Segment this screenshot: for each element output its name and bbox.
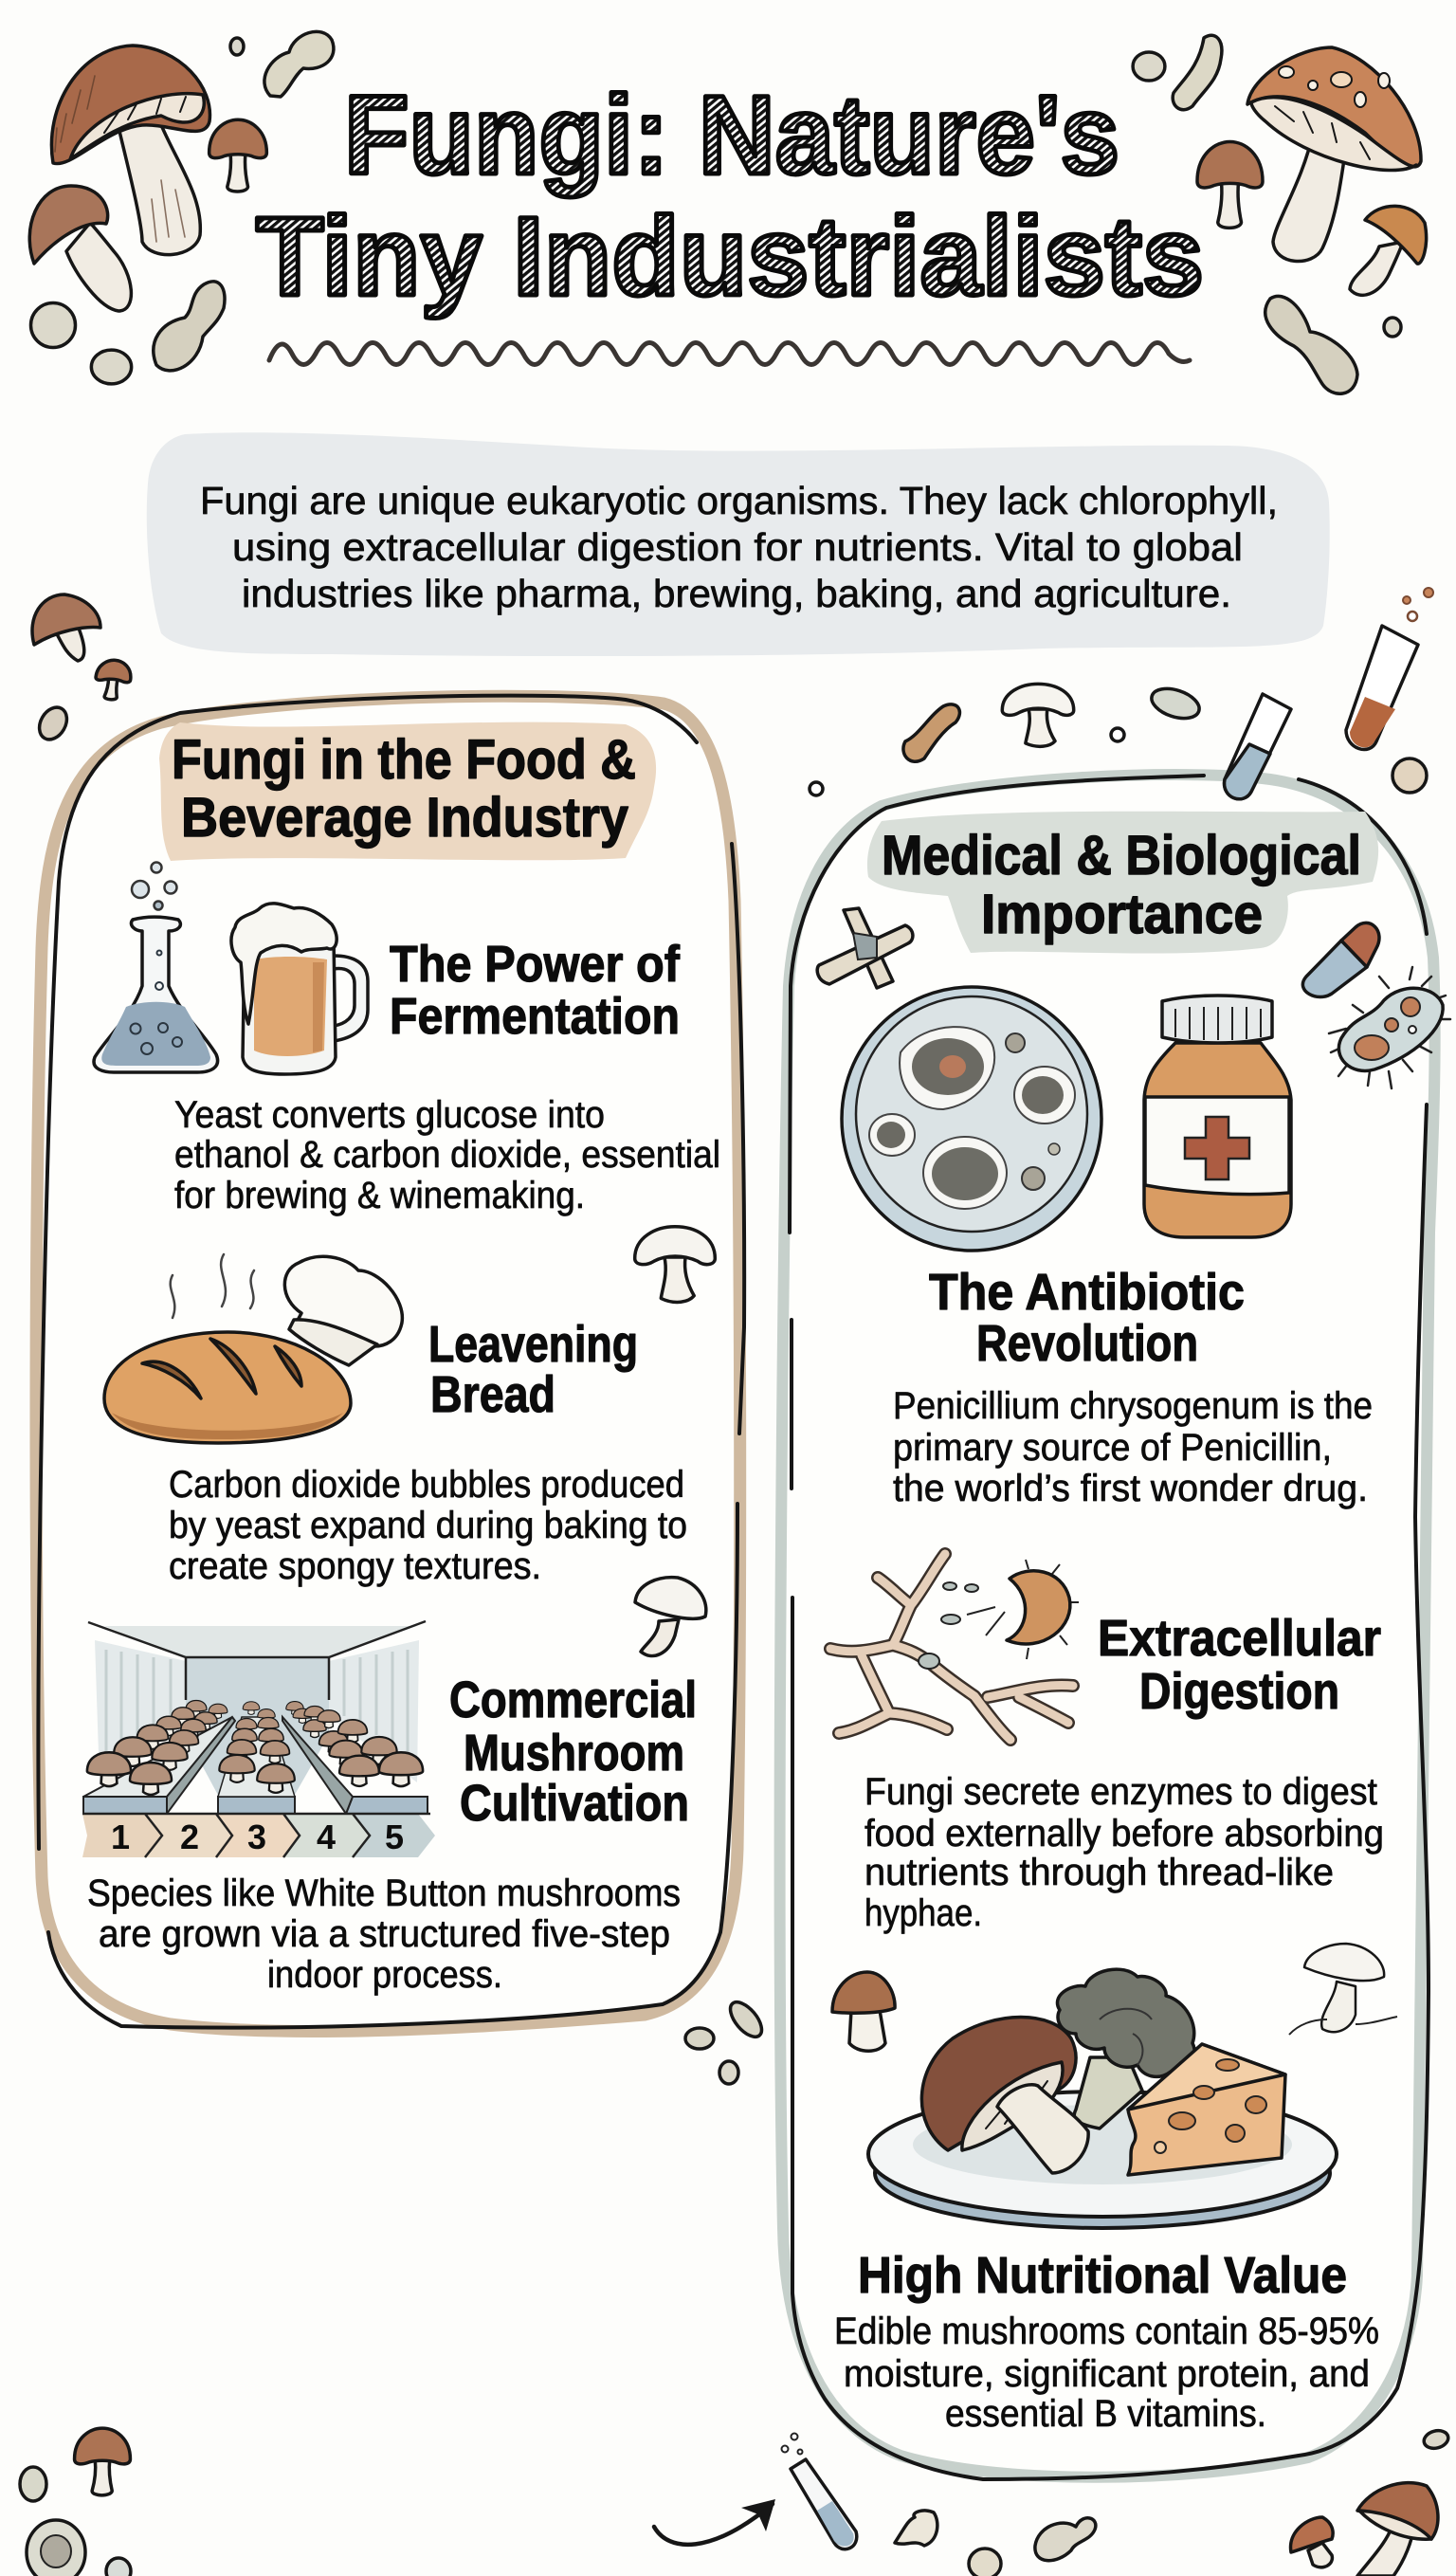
text: nutrition body [834,2311,1379,2435]
icon: elongated spore [724,1997,768,2042]
cheese [1128,2044,1285,2175]
icon: large brown mushroom [51,46,209,255]
text: digestion body: nutrients through thread-like [864,1852,1334,1893]
icon: blue test tube [1225,694,1291,799]
icon: budding yeast [154,282,225,371]
heading: the power of fermentation [390,936,681,1045]
decoration: top-left mushrooms and spores [29,31,334,384]
text: cultivation body: indoor process. [267,1954,502,1996]
text: leavening body: by yeast expand during baking to [169,1505,687,1546]
food particle [1007,1560,1079,1659]
icon: round spore [1392,758,1427,793]
icon: large spore [27,2520,85,2576]
icon: small spore [106,2558,131,2576]
heading: the antibiotic revolution: Revolution [976,1315,1198,1372]
heading: medical and biological: Importance [981,884,1263,945]
title [256,73,1204,320]
decoration: bottom-left mushrooms and spores [20,2428,131,2576]
text: nutrition body: moisture, significant protein, and [844,2353,1370,2395]
five step chevrons [82,1814,435,1857]
icon: brown mushroom [32,594,100,661]
heading: extracellular digestion: Extracellular [1098,1610,1381,1667]
text: digestion body: Fungi secrete enzymes to digest [864,1771,1377,1813]
icon: white mushroom with mycelium [1289,1944,1397,2035]
illustration: medicine jar [1144,996,1291,1237]
icon: chef hat [284,1256,402,1365]
icon: large brown mushroom [1357,2483,1438,2576]
text: cultivation body: are grown via a structured five-step [99,1913,670,1955]
icon: spore [34,703,72,744]
icon: small tilted mushroom [1350,206,1427,295]
decoration: top-right mushrooms and spores [1133,35,1427,393]
icon: elongated spore [1173,35,1222,110]
icon: spore [685,2028,714,2049]
intro background blob [147,432,1330,656]
icon: bacterium [1329,967,1450,1088]
icon: ring [810,782,823,795]
icon: peanut-shaped yeast top [264,31,334,97]
text: antibiotic body: primary source of Penicillin, [893,1427,1332,1469]
five step chevrons: 1 [111,1818,130,1856]
icon: white mushroom [635,1227,715,1302]
broccoli [1057,1969,1194,2128]
icon: oval spore [30,303,76,347]
heading: leavening bread: Leavening [428,1316,638,1373]
text: antibiotic body: Penicillium chrysogenum is the [893,1385,1373,1427]
illustration: hyphae digesting food [830,1554,1079,1740]
wavy divider under title [269,343,1190,364]
illustration: mushroom farm [82,1621,435,1857]
text: fermentation body: Yeast converts glucose into [174,1094,605,1136]
heading: the power of fermentation: Fermentation [390,988,680,1045]
icon: spore dot [1384,318,1401,337]
icon: small brown mushroom [209,119,266,192]
icon: steam [171,1254,254,1318]
heading: medical and biological: Medical & Biological [882,825,1361,886]
text: nutrition body: essential B vitamins. [945,2393,1266,2435]
icon: small white mushroom [895,2511,937,2546]
icon: spore [719,2061,738,2084]
five step chevrons: 5 [385,1818,404,1856]
text: leavening body: Carbon dioxide bubbles produced [169,1464,684,1506]
heading: high nutritional value: High Nutritional Value [858,2247,1347,2304]
five step chevrons: 4 [317,1818,336,1856]
intro text [200,479,1278,615]
panel border [780,775,1435,2479]
arrow [654,2499,775,2545]
title: Fungi: Nature's [344,73,1119,198]
icon: bandage [817,908,913,988]
five step chevrons: 3 [247,1818,266,1856]
decoration: mid-left mushrooms [32,594,133,744]
icon: spore dot [230,38,244,55]
icon: oval spore [1422,2428,1450,2451]
text: antibiotic body [893,1385,1373,1509]
heading: commercial mushroom cultivation [449,1672,697,1832]
panel border [36,696,744,2031]
text: fermentation body: ethanol & carbon dioxide, essential [174,1134,720,1176]
icon: budding yeast [1265,296,1357,393]
icon: mushroom [75,2428,130,2495]
icon: medium tilted mushroom [29,186,131,311]
text: leavening body [169,1464,687,1587]
heading: food and beverage [159,722,656,861]
icon: test tube with bubbles [781,2433,857,2549]
icon: capsule [1302,923,1379,997]
icon: spotted white mushroom [1002,684,1074,746]
icon: bread loaf [104,1332,351,1443]
heading: extracellular digestion [1098,1610,1381,1720]
mold colonies [869,1027,1075,1209]
illustration: petri dish [842,987,1101,1251]
icon: small brown mushroom [1291,2517,1333,2567]
heading: the power of fermentation: The Power of [390,936,681,993]
heading: commercial mushroom cultivation: Mushroom [464,1725,684,1781]
intro text: Fungi are unique eukaryotic organisms. They lack chlorophyll, [200,479,1278,522]
text: cultivation body: Species like White Button mushrooms [87,1873,681,1914]
heading: commercial mushroom cultivation: Cultivation [460,1775,689,1832]
icon: small brown mushroom [832,1972,895,2051]
decoration: upper-right lab items [810,588,1433,799]
heading: food and beverage: Beverage Industry [181,787,628,849]
heading: commercial mushroom cultivation: Commercial [449,1672,697,1728]
text: digestion body [864,1771,1384,1934]
icon: yeast bit [903,704,959,761]
icon: flask [94,863,218,1072]
title: Tiny Industrialists [256,194,1204,320]
intro text: industries like pharma, brewing, baking, and agriculture. [242,572,1231,615]
icon: tiny mushroom [93,659,133,701]
heading: leavening bread [428,1316,638,1423]
large mushroom [921,2018,1088,2173]
heading: food and beverage: Fungi in the Food & [172,729,636,791]
heading: the antibiotic revolution: The Antibiotic [929,1264,1245,1321]
text: digestion body: food externally before absorbing [864,1813,1384,1854]
icon: brown test tube [1346,588,1433,750]
icon: oval spore [1133,52,1165,81]
hyphae branches [830,1554,1073,1740]
icon: white mushroom [635,1578,706,1656]
plate [868,2092,1337,2228]
mushrooms rows [87,1701,423,1795]
heading highlight [867,812,1378,954]
room [88,1621,426,1813]
heading: extracellular digestion: Digestion [1139,1663,1339,1720]
heading highlight [159,722,656,861]
heading: leavening bread: Bread [430,1366,555,1423]
five step chevrons: 2 [180,1818,199,1856]
text: leavening body: create spongy textures. [169,1545,541,1587]
icon: oval spore [20,2467,46,2501]
text: antibiotic body: the world’s first wonder drug. [893,1468,1368,1509]
text: fermentation body [174,1094,720,1216]
icon: small spore [91,350,132,384]
icon: budding yeast [1035,2518,1096,2561]
icon: oval spore [1148,684,1203,723]
intro text: using extracellular digestion for nutrients. Vital to global [232,525,1243,569]
decoration: spores between panels [685,1997,768,2084]
icon: large orange spotted mushroom [1247,47,1421,262]
text: digestion body: hyphae. [864,1892,982,1934]
illustration: plate of nutritious food [868,1969,1337,2228]
heading: medical and biological [867,812,1378,954]
icon: round spore [969,2549,1001,2576]
heading: the antibiotic revolution [929,1264,1245,1372]
text: cultivation body [87,1873,681,1996]
benches [83,1717,428,1814]
decoration: bottom-right items [781,2428,1450,2576]
icon: beer mug [231,904,368,1074]
enzymes [919,1582,1005,1669]
panel: food and beverage [36,696,744,2031]
icon: medium brown mushroom [1197,141,1263,228]
panel: medical and biological [780,775,1450,2479]
intro panel [147,432,1330,656]
icon: ring [1111,728,1124,741]
text: nutrition body: Edible mushrooms contain 85-95% [834,2311,1379,2352]
text: fermentation body: for brewing & winemaking. [174,1175,585,1216]
